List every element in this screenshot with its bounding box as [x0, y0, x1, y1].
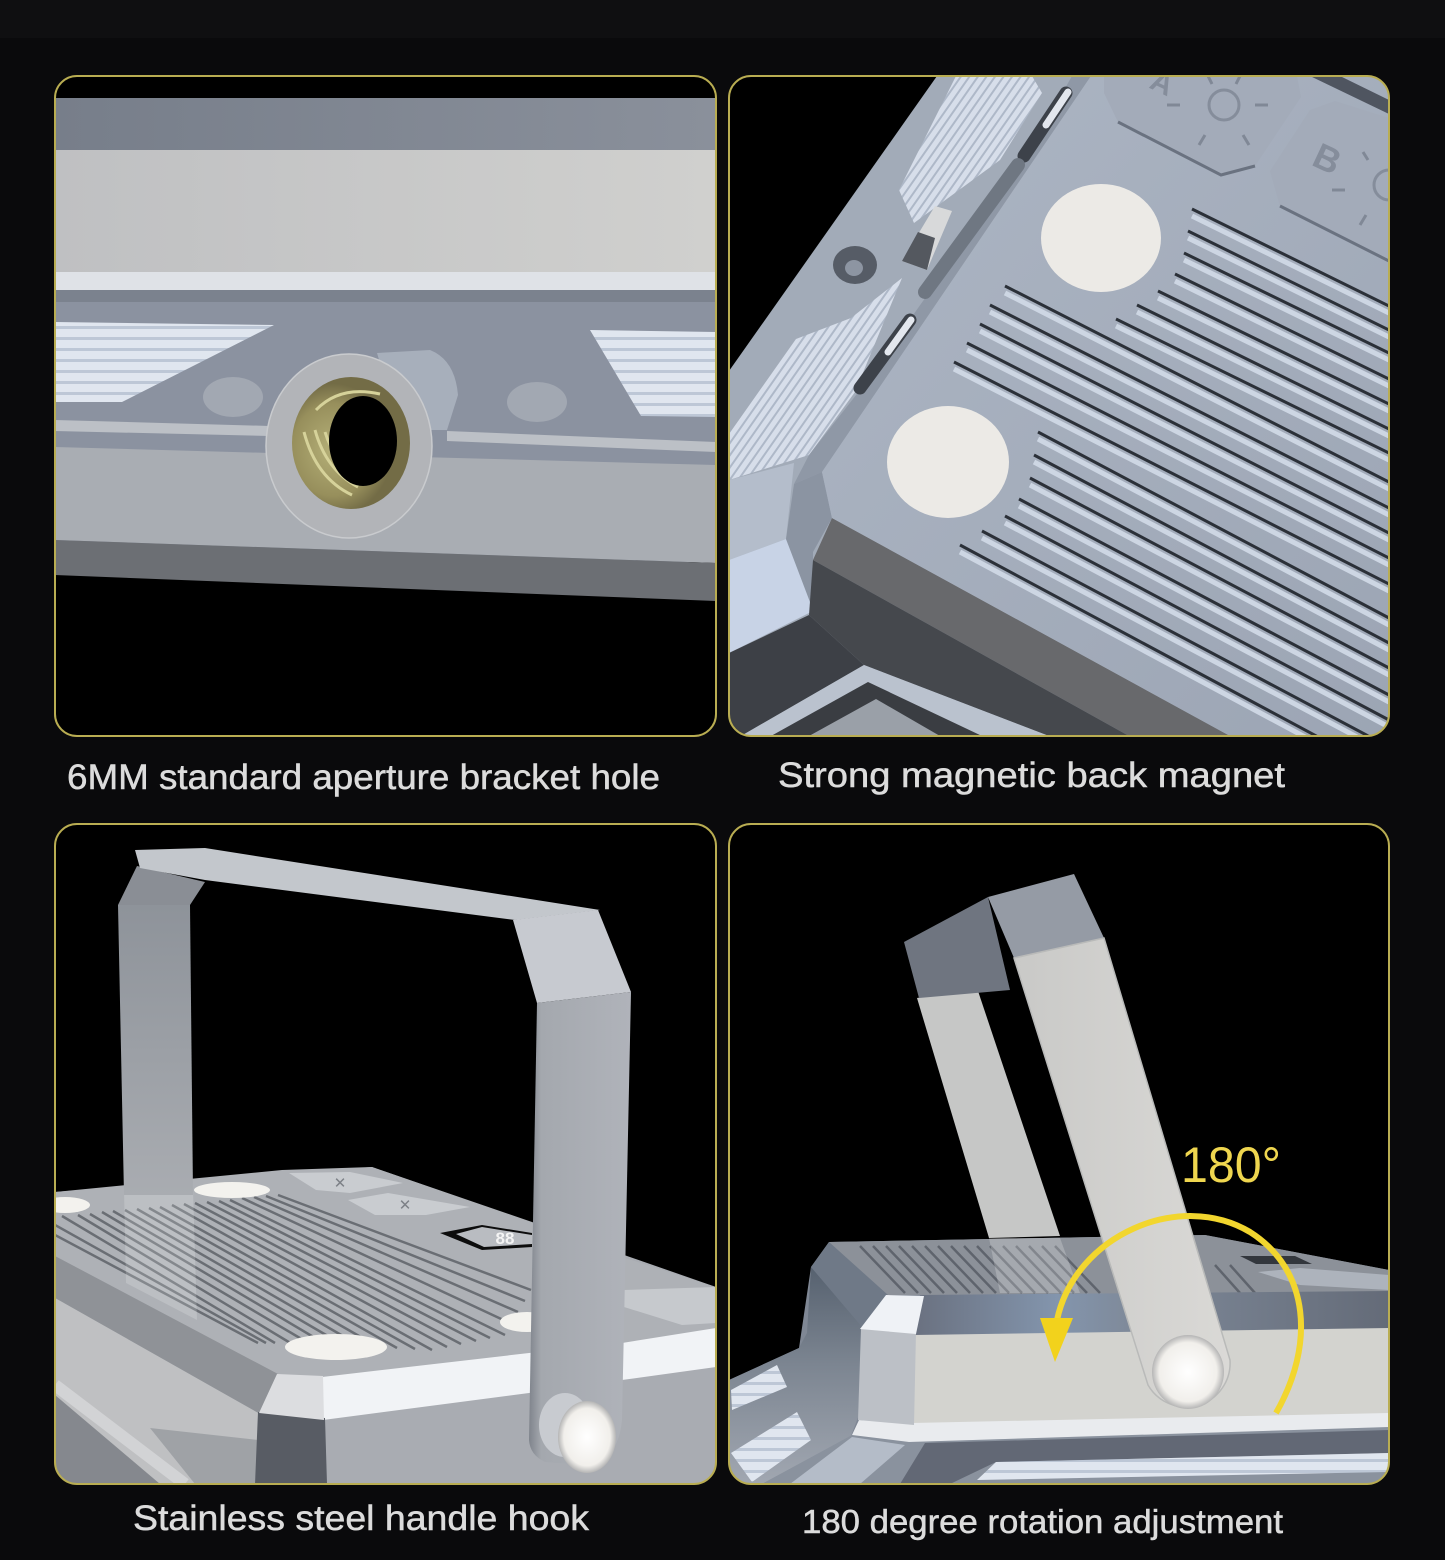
white bevel — [860, 1295, 924, 1334]
handle crossbar — [135, 848, 600, 920]
pin shade — [902, 232, 935, 270]
panel: back magnet — [729, 64, 1404, 782]
rail channel — [794, 76, 1091, 484]
slot lower highlight — [888, 320, 911, 352]
handle rear arm — [118, 905, 193, 1195]
button 1 — [289, 1172, 403, 1193]
rotation label: 180° — [1181, 1137, 1281, 1193]
panel: rotation adjustment — [729, 824, 1389, 1484]
bottom left light — [790, 1437, 905, 1484]
button B — [1270, 101, 1404, 261]
device base — [55, 1167, 716, 1484]
rib block 1 — [731, 1365, 787, 1410]
front face — [910, 1328, 1389, 1425]
side band — [55, 1256, 278, 1414]
bottom ribbed — [809, 699, 940, 736]
corner bevel — [259, 1374, 324, 1420]
arm reflection — [989, 1238, 1080, 1293]
side rail — [730, 77, 1228, 735]
screw hole — [833, 246, 877, 284]
button A letter: A — [1145, 64, 1179, 103]
button 2: ✕ — [399, 1197, 411, 1214]
top display — [1240, 1256, 1312, 1264]
small left recess — [203, 377, 263, 417]
vent stripes — [55, 1195, 531, 1350]
right button — [624, 1287, 716, 1325]
side wall upper — [813, 518, 1230, 736]
main back face — [822, 77, 1228, 735]
handle top rear — [904, 897, 1010, 998]
upper grey band — [55, 98, 716, 150]
corner face — [858, 1328, 916, 1425]
middle steel body — [56, 302, 715, 562]
magnets — [40, 1182, 554, 1360]
lower steel band — [55, 447, 716, 563]
pivot — [1152, 1335, 1224, 1409]
device top face — [55, 1167, 716, 1377]
caption: magnet: Strong magnetic back magnet — [778, 756, 1285, 795]
light tube — [55, 1385, 185, 1484]
vent highlights — [954, 216, 1389, 782]
device base — [729, 1235, 1389, 1484]
left block lower — [729, 539, 815, 653]
ribbed rail upper — [899, 76, 1042, 223]
top button — [1258, 1268, 1389, 1290]
top strip — [0, 0, 1445, 38]
dark band — [915, 1291, 1389, 1336]
top right groove — [1310, 76, 1389, 114]
left side — [729, 1267, 862, 1484]
display: 88 — [496, 1229, 514, 1248]
right ridge — [447, 431, 716, 452]
left bevel — [811, 1242, 888, 1329]
left lower shade — [55, 1395, 160, 1484]
magnet 1 — [1041, 184, 1161, 292]
vent stripes — [954, 209, 1389, 775]
handle corner — [513, 910, 631, 1003]
button 1: ✕ — [334, 1175, 346, 1192]
bottom frame — [741, 665, 1049, 736]
dark band lower — [900, 1430, 1389, 1484]
caption: bracket hole: 6MM standard aperture bracket hole — [67, 758, 660, 797]
threaded hole — [266, 354, 432, 538]
hole bump — [377, 350, 458, 430]
bottom ribbed — [977, 1453, 1389, 1480]
rear arm reflection — [124, 1190, 197, 1320]
handle top front — [988, 874, 1104, 958]
panel: handle hook — [40, 824, 716, 1484]
device top — [829, 1235, 1389, 1295]
rotation arrow — [1040, 1216, 1301, 1413]
lower dark edge — [55, 540, 716, 601]
left ribbed trapezoid — [55, 322, 274, 402]
bottom white line — [852, 1413, 1389, 1442]
display — [440, 1225, 532, 1250]
pivot shaft — [539, 1393, 591, 1457]
front arm — [1014, 938, 1230, 1407]
small right recess — [507, 382, 567, 422]
rear arm — [917, 988, 1060, 1238]
left block upper — [729, 463, 794, 560]
left front — [55, 1298, 260, 1484]
corner bevel — [786, 472, 832, 610]
dark lower left — [729, 615, 864, 736]
bright strip — [322, 1328, 716, 1420]
button 2 — [348, 1193, 470, 1215]
panel: bracket hole — [55, 76, 716, 736]
side wall lower — [809, 560, 1129, 736]
ribbed rail lower — [729, 278, 902, 480]
button B letter: B — [1307, 135, 1348, 183]
button A — [1117, 77, 1268, 177]
light brushed band — [55, 150, 716, 272]
rib block 2 — [731, 1412, 811, 1482]
lower shade — [150, 1428, 258, 1484]
right ribbed trapezoid — [590, 330, 716, 417]
handle front arm — [529, 992, 631, 1465]
hinge slot shade — [925, 165, 1018, 292]
below front — [762, 1427, 1389, 1484]
slot upper highlight — [1046, 92, 1068, 125]
bottom frame inside — [771, 682, 982, 736]
hinge pin — [902, 206, 952, 270]
handle rear corner — [118, 866, 205, 905]
slot upper — [1024, 93, 1066, 156]
pivot — [558, 1401, 616, 1473]
top stripes — [860, 1246, 1255, 1293]
magnet 2 — [887, 406, 1009, 518]
caption: handle: Stainless steel handle hook — [133, 1499, 590, 1538]
left ridge — [55, 420, 270, 436]
slot lower — [860, 320, 910, 388]
dark corner — [255, 1412, 327, 1484]
caption: rotation: 180 degree rotation adjustment — [802, 1503, 1283, 1540]
